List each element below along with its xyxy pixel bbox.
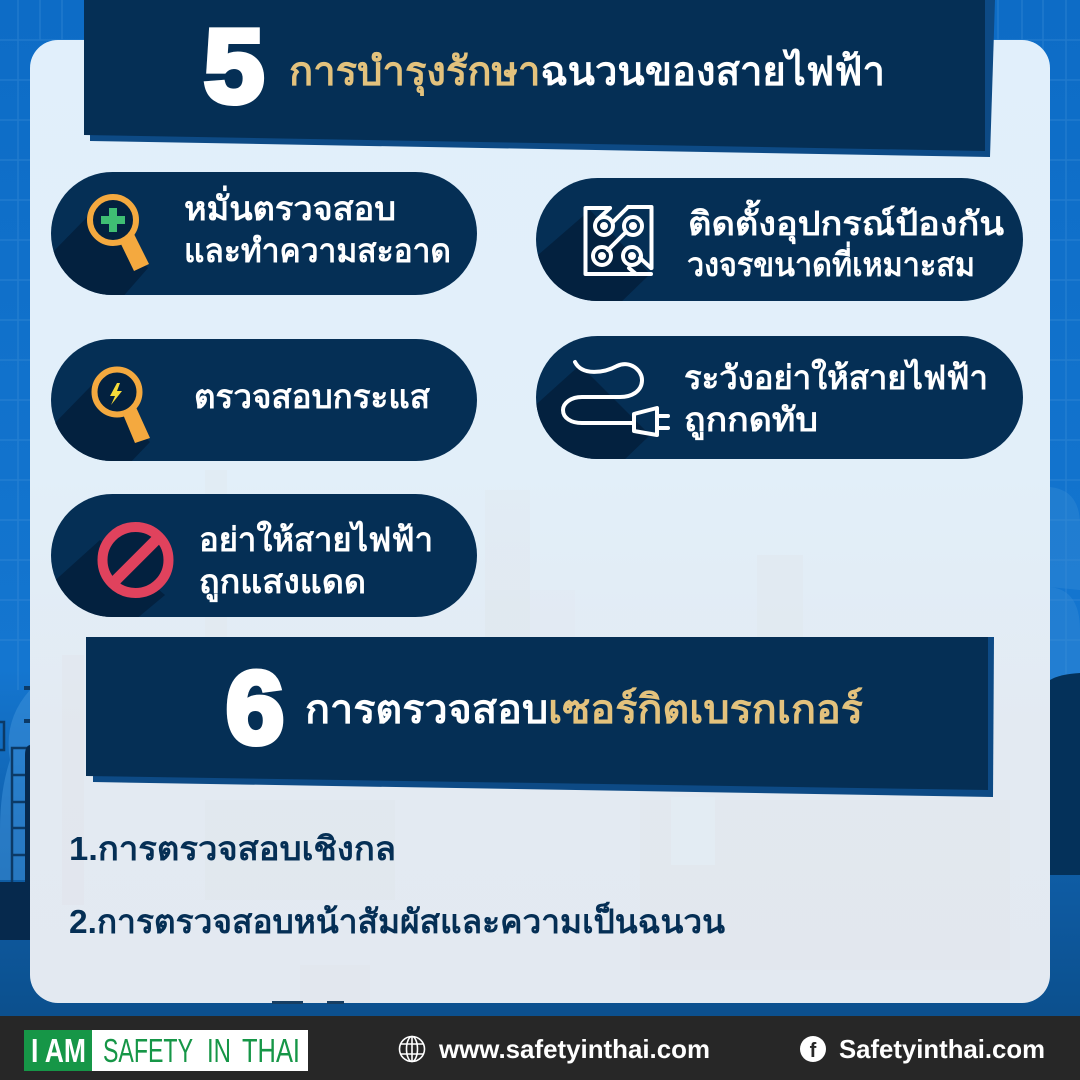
logo: IN [207, 1032, 231, 1069]
pill: beware of crushing wire [530, 336, 1023, 462]
logo: SAFETY [103, 1032, 193, 1069]
long shadow [530, 365, 650, 462]
pill text [199, 520, 433, 603]
pill text: วงจรขนาดที่เหมาะสม [687, 241, 975, 283]
logo [24, 1030, 308, 1071]
facebook name: Safetyinthai.com [839, 1034, 1045, 1064]
icon: circuit board [586, 207, 652, 274]
heading 5 [84, 0, 995, 157]
icon: prohibition sign [102, 527, 168, 593]
item 2: 2.การตรวจสอบหน้าสัมผัสและความเป็นฉนวน [69, 901, 725, 940]
number 6: 6 [226, 651, 284, 765]
pill: install protective device [530, 178, 1023, 305]
item 1: 1.การตรวจสอบเชิงกล [69, 830, 396, 867]
pill text: ถูกกดทับ [684, 401, 818, 441]
website: www.safetyinthai.com [438, 1034, 710, 1064]
list: inspection methods [69, 830, 725, 940]
pill text [687, 199, 1004, 283]
number 5: 5 [204, 9, 264, 125]
long shadow [538, 210, 648, 301]
icon: magnifier bolt [94, 370, 150, 443]
heading 6 [86, 637, 994, 797]
logo: I AM [31, 1032, 86, 1069]
footer bar [0, 1016, 1080, 1080]
pill text: ถูกแสงแดด [199, 563, 366, 603]
long shadow [50, 385, 150, 465]
pill: check current [50, 339, 477, 465]
pill text: หมั่นตรวจสอบ [184, 185, 396, 227]
long shadow [50, 540, 165, 620]
logo: THAI [242, 1032, 300, 1069]
heading text 5: การบำรุงรักษาฉนวนของสายไฟฟ้า [289, 48, 885, 97]
pill text: อย่าให้สายไฟฟ้า [199, 520, 433, 558]
icon: magnifier plus [90, 197, 149, 271]
pill: avoid sunlight [50, 494, 477, 620]
pill text [684, 358, 988, 441]
pill text: ระวังอย่าให้สายไฟฟ้า [684, 358, 988, 396]
pill text: ตรวจสอบกระแส [194, 378, 431, 415]
heading text 6: การตรวจสอบเซอร์กิตเบรกเกอร์ [305, 687, 864, 732]
icon: globe [400, 1036, 424, 1062]
pill text: ติดตั้งอุปกรณ์ป้องกัน [688, 199, 1004, 245]
pill text [184, 185, 451, 269]
icon: facebook: f [810, 1040, 817, 1062]
pill text: และทำความสะอาด [184, 232, 451, 269]
icon: facebook [800, 1036, 826, 1062]
icon: power cord [563, 362, 668, 435]
pill: clean and inspect [50, 172, 477, 300]
long shadow [54, 218, 148, 295]
